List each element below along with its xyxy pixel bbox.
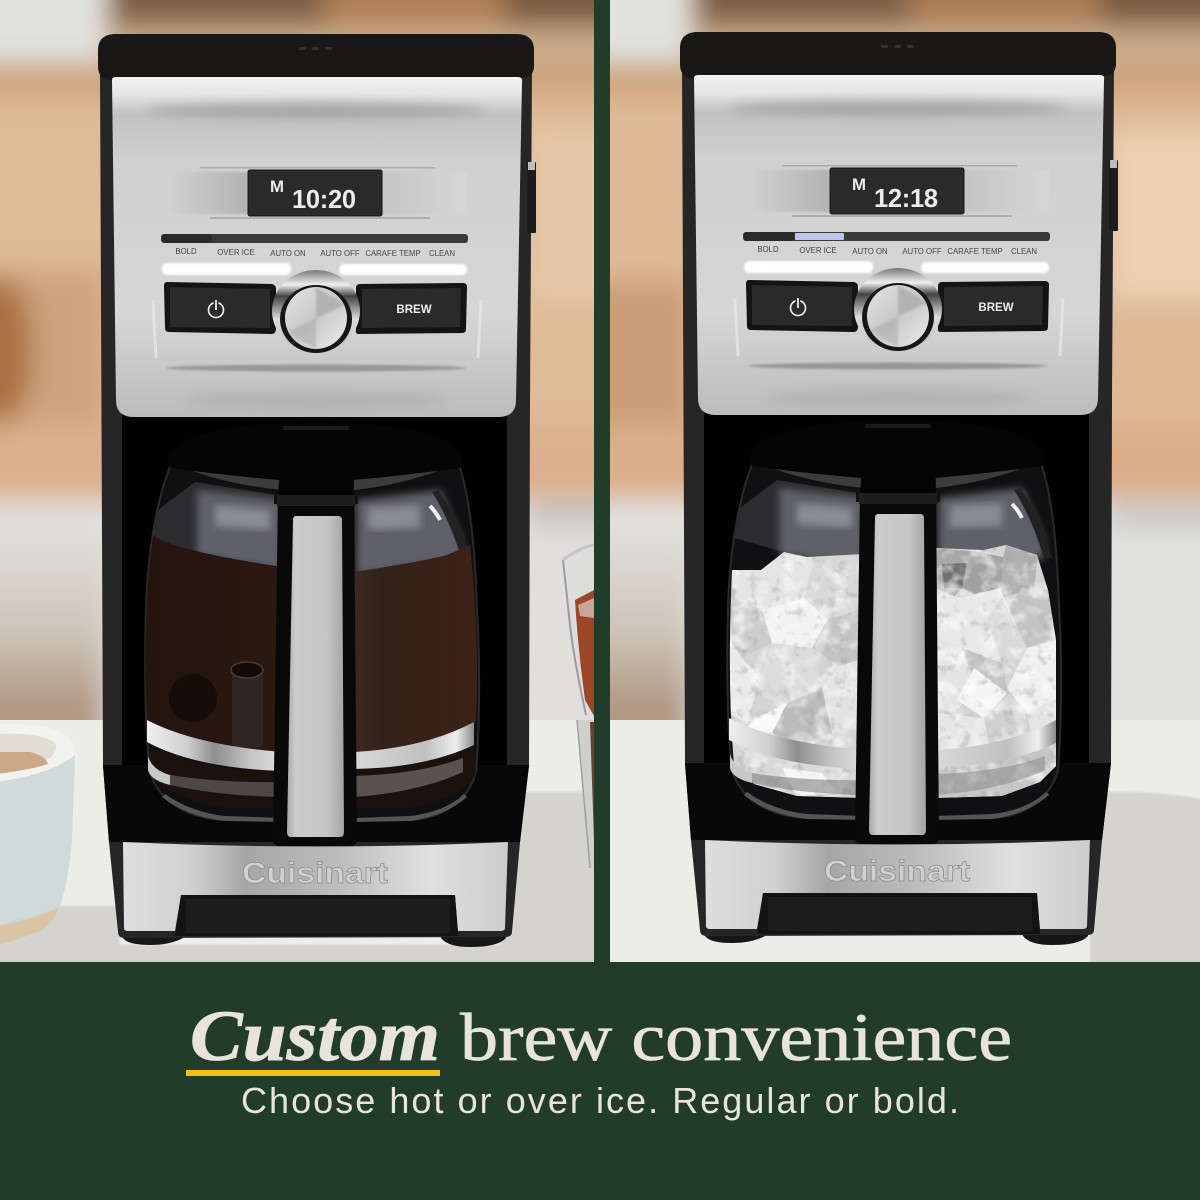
- LCD clock left: 10:20: [292, 186, 356, 214]
- countertop right: [610, 720, 1200, 962]
- function labels left: CLEAN: [429, 249, 455, 258]
- carafe with ice: [722, 421, 1067, 844]
- LCD clock right: [853, 178, 938, 208]
- brand name right: Cuisinart: [824, 855, 970, 888]
- carafe with hot coffee: [140, 423, 485, 846]
- function labels left: CARAFE TEMP: [365, 249, 421, 258]
- LCD clock left: M: [270, 177, 284, 196]
- function labels left: BOLD: [175, 247, 197, 256]
- countertop: [0, 720, 594, 962]
- heading: [190, 996, 1012, 1076]
- heading remainder: brew convenience: [460, 999, 1012, 1075]
- coffee liquid: [145, 535, 477, 752]
- function labels left: AUTO OFF: [320, 249, 360, 258]
- icon: mug at left: [0, 724, 75, 945]
- brew button label right: BREW: [978, 302, 1014, 314]
- panel: over ice scene: [570, 0, 1200, 970]
- LCD clock right: M: [852, 175, 866, 194]
- ice cubes: [730, 545, 1056, 798]
- panel: hot coffee scene: [0, 0, 640, 970]
- blurred kitchen background right: [610, 0, 1200, 720]
- heading emphasis word: Custom: [190, 996, 440, 1076]
- function labels left: AUTO ON: [270, 249, 306, 258]
- function labels right: AUTO OFF: [902, 247, 942, 256]
- function labels right: OVER ICE: [799, 246, 837, 255]
- function labels left: OVER ICE: [217, 248, 255, 257]
- LCD clock right: 12:18: [874, 185, 938, 213]
- function labels left: [176, 248, 454, 256]
- brew button label left: BREW: [396, 304, 432, 316]
- function labels right: CLEAN: [1011, 247, 1037, 256]
- function labels right: AUTO ON: [852, 247, 888, 256]
- function labels right: [758, 246, 1036, 254]
- function labels right: CARAFE TEMP: [947, 247, 1003, 256]
- coffee maker right: [680, 32, 1118, 945]
- icon: iced coffee glass at right: [563, 545, 594, 870]
- function labels right: BOLD: [757, 245, 779, 254]
- brand name left: Cuisinart: [242, 857, 388, 890]
- coffee maker left: [98, 34, 536, 947]
- blurred kitchen background left: [0, 0, 594, 720]
- LCD clock left: [271, 180, 355, 208]
- OVER ICE indicator lit: [795, 233, 844, 240]
- yellow underline: [186, 1070, 440, 1076]
- subheading: Choose hot or over ice. Regular or bold.: [241, 1080, 959, 1121]
